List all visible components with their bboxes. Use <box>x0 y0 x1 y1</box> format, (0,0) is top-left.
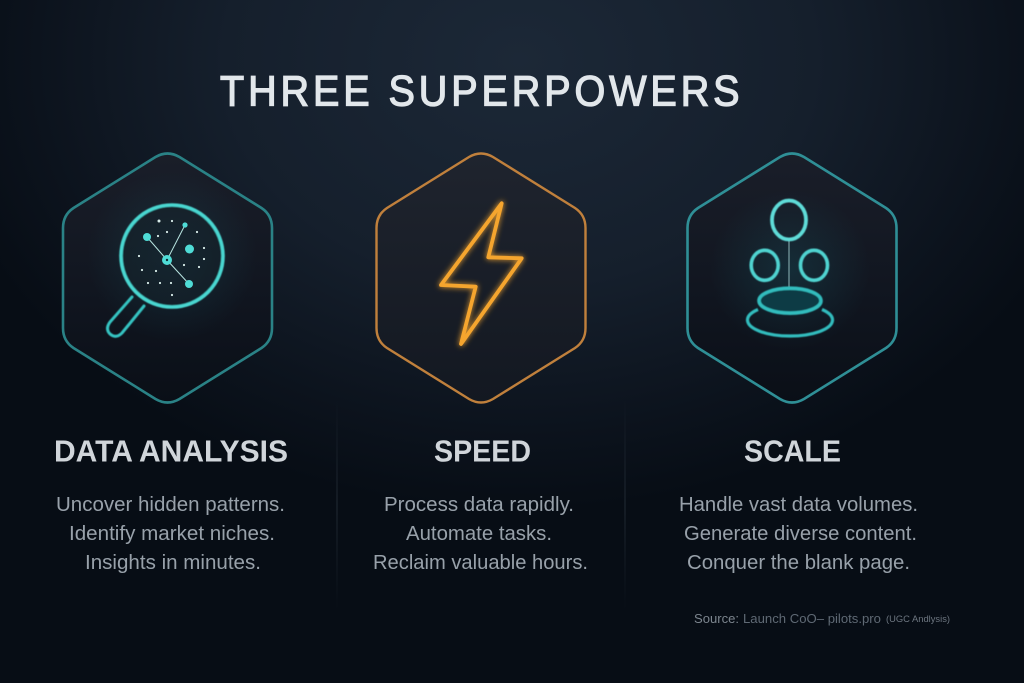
panel: speed <box>373 154 588 574</box>
text: speed description: Process data rapidly. <box>384 493 574 516</box>
title: THREE SUPERPOWERS <box>220 67 743 115</box>
panel: scale <box>679 154 918 574</box>
text: scale description: Conquer the blank page. <box>687 551 910 574</box>
hexagon: scale <box>688 154 896 402</box>
text: scale description <box>679 493 918 574</box>
icon: scaling circles on platform <box>710 190 870 350</box>
text: speed description: Reclaim valuable hours. <box>373 551 588 574</box>
heading: scale: SCALE <box>744 434 841 468</box>
icon: magnifying glass with data points <box>87 171 257 341</box>
text: data analysis description: Uncover hidden patterns. <box>56 493 285 516</box>
text: data analysis description: Identify market niches. <box>69 522 275 545</box>
source note <box>694 611 950 626</box>
text: speed description: Automate tasks. <box>406 522 552 545</box>
panel: data analysis <box>54 154 288 574</box>
hexagon: data analysis <box>63 154 272 402</box>
heading: data analysis: DATA ANALYSIS <box>54 434 288 468</box>
text: speed description <box>373 493 588 574</box>
source note: Source: <box>694 611 739 626</box>
hexagon: speed <box>376 154 586 402</box>
text: scale description: Handle vast data volumes. <box>679 493 918 516</box>
icon: lightning bolt <box>441 203 522 344</box>
source note: Launch CoO– pilots.pro <box>743 611 881 626</box>
text: scale description: Generate diverse content. <box>684 522 917 545</box>
text: data analysis description <box>56 493 285 574</box>
text: data analysis description: Insights in minutes. <box>85 551 261 574</box>
source note: (UGC Andlysis) <box>886 614 950 624</box>
heading: speed: SPEED <box>434 434 531 468</box>
